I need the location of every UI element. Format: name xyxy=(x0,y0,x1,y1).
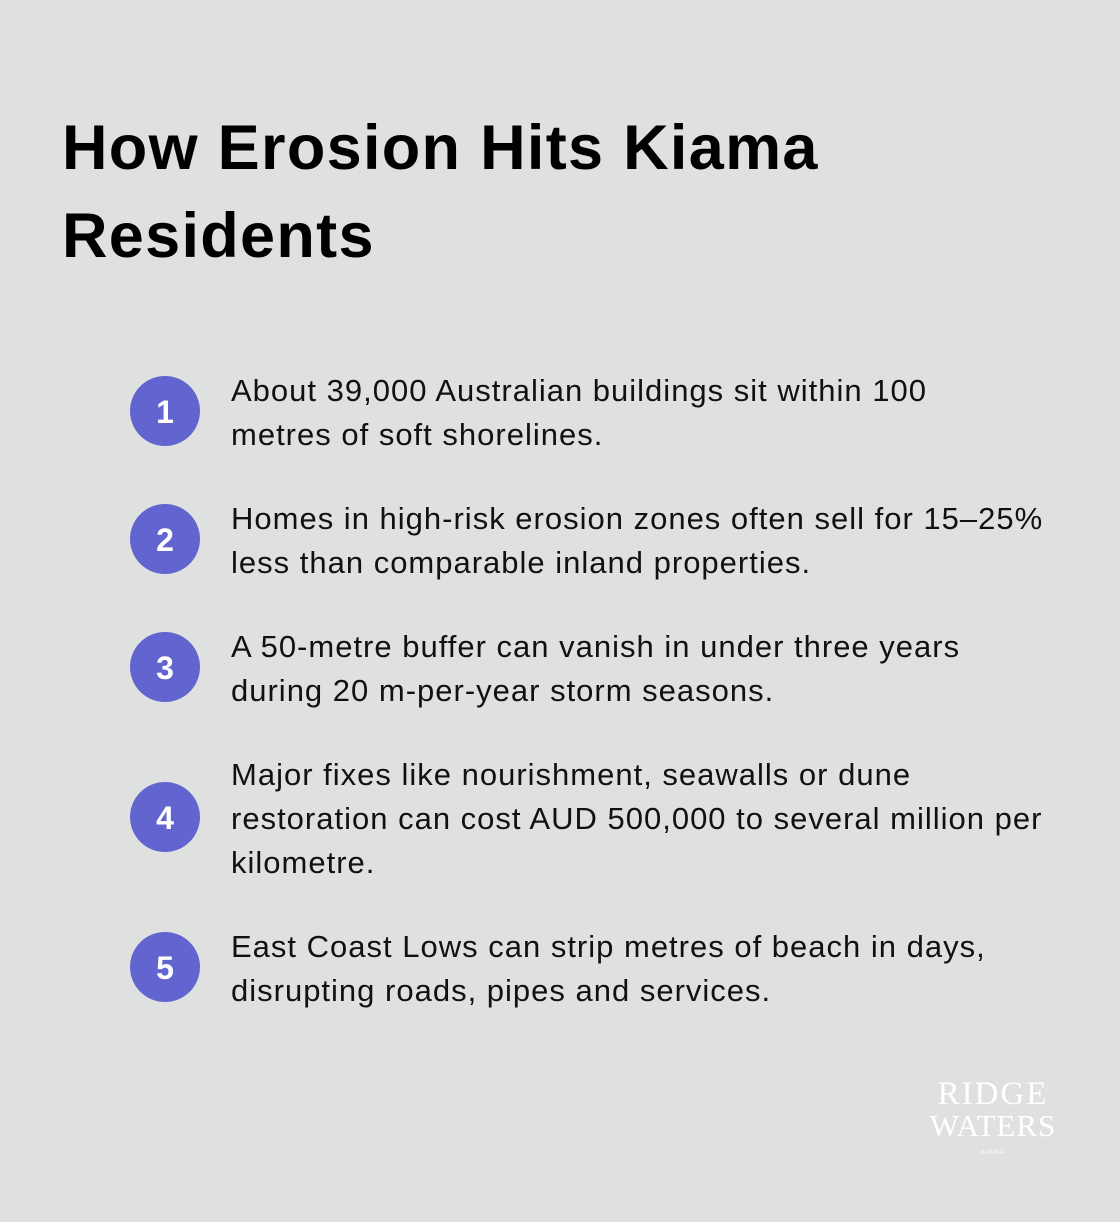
title: How Erosion Hits Kiama xyxy=(62,113,819,183)
circle 4 xyxy=(130,782,200,852)
circle 2 xyxy=(130,504,200,574)
item 3 xyxy=(130,629,960,708)
text 5: disrupting roads, pipes and services. xyxy=(231,973,771,1008)
text 3: during 20 m-per-year storm seasons. xyxy=(231,673,774,708)
item 1 xyxy=(130,373,927,452)
text 3: A 50-metre buffer can vanish in under three years xyxy=(231,629,960,664)
title xyxy=(62,113,819,271)
circle 3: 3 xyxy=(156,650,174,686)
circle 3 xyxy=(130,632,200,702)
text 1: About 39,000 Australian buildings sit within 100 xyxy=(231,373,927,408)
item 5 xyxy=(130,929,986,1008)
logo: KIAMA xyxy=(981,1150,1005,1156)
text 2: Homes in high-risk erosion zones often sell for 15–25% xyxy=(231,501,1043,536)
text 2: less than comparable inland properties. xyxy=(231,545,811,580)
text 5: East Coast Lows can strip metres of beach in days, xyxy=(231,929,986,964)
text 4: kilometre. xyxy=(231,845,375,880)
circle 4: 4 xyxy=(156,800,174,836)
item 4 xyxy=(130,757,1042,880)
text 1 xyxy=(231,373,927,452)
text 2 xyxy=(231,501,1043,580)
circle 5 xyxy=(130,932,200,1002)
circle 1 xyxy=(130,376,200,446)
logo: RIDGE xyxy=(938,1076,1048,1112)
title: Residents xyxy=(62,201,375,271)
text 1: metres of soft shorelines. xyxy=(231,417,603,452)
text 5 xyxy=(231,929,986,1008)
circle 2: 2 xyxy=(156,522,174,558)
logo xyxy=(930,1076,1056,1156)
item 2 xyxy=(130,501,1043,580)
text 4: Major fixes like nourishment, seawalls or dune xyxy=(231,757,911,792)
logo: WATERS xyxy=(930,1108,1056,1143)
text 4 xyxy=(231,757,1042,880)
text 4: restoration can cost AUD 500,000 to several million per xyxy=(231,801,1042,836)
circle 1: 1 xyxy=(156,394,174,430)
text 3 xyxy=(231,629,960,708)
circle 5: 5 xyxy=(156,950,174,986)
